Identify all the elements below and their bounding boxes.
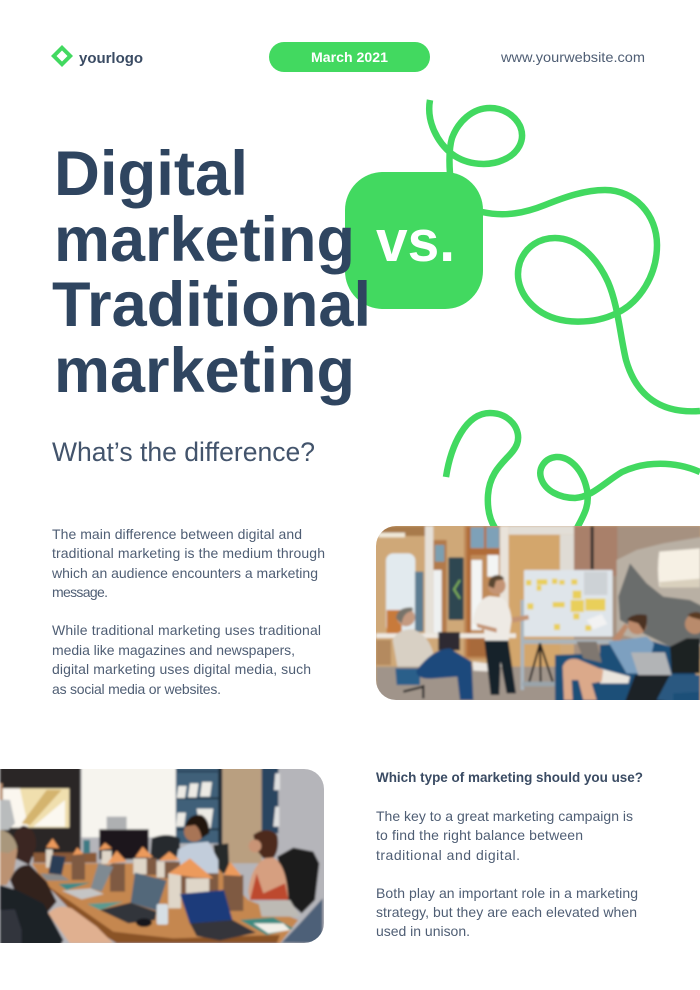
curve: question mark [446,413,518,528]
title: Traditional [52,270,371,340]
date pill [269,42,430,72]
text block: advice [376,808,638,939]
text block: intro: which an audience encounters a marketing [51,565,318,581]
man in shirt [173,842,218,875]
logo [51,45,143,67]
text block: intro: While traditional marketing uses traditional [52,622,321,638]
vs. badge: vs. [376,209,455,274]
text block: intro: as social media or websites. [52,681,221,697]
curve: top loop [429,100,522,174]
standing man [473,596,512,642]
text block: intro [51,526,325,697]
woman [277,848,319,913]
laptops [48,855,66,875]
text block: advice: traditional and digital. [376,847,520,863]
seated man left [393,629,433,667]
photo: team at whiteboard [370,520,700,707]
title [52,139,371,406]
sofa and men [555,642,700,703]
text block: advice: The key to a great marketing campaign is [376,808,633,824]
title: marketing [54,336,355,406]
title: Digital [54,139,248,209]
vs. badge [345,172,483,309]
photo: meeting room table [0,767,330,947]
subtitle: What’s the difference? [52,437,315,467]
website url: www.yourwebsite.com [500,49,645,65]
heading: which type: Which type of marketing should you use? [376,769,643,785]
text block: intro: digital marketing uses digital media, such [52,661,311,677]
text block: advice: used in unison. [376,923,470,939]
text block: intro: traditional marketing is the medium through [52,545,325,561]
logo wordmark: yourlogo [79,50,143,67]
icon: logo diamond [51,45,73,67]
curve: small loop [540,457,700,528]
title: marketing [54,205,355,275]
text block: advice: to find the right balance between [376,827,583,843]
gift bags [72,855,243,911]
whiteboard [521,600,524,690]
text block: intro: The main difference between digital and [52,526,302,542]
text block: advice: strategy, but they are each elevated when [376,904,637,920]
table [32,863,298,943]
date pill: March 2021 [311,49,388,65]
text block: intro: message. [52,584,108,600]
curve: long swirl [482,190,700,411]
text block: intro: media like magazines and newspapers, [52,642,295,658]
foreground people [11,826,36,865]
text block: advice: Both play an important role in a marketing [376,885,638,901]
